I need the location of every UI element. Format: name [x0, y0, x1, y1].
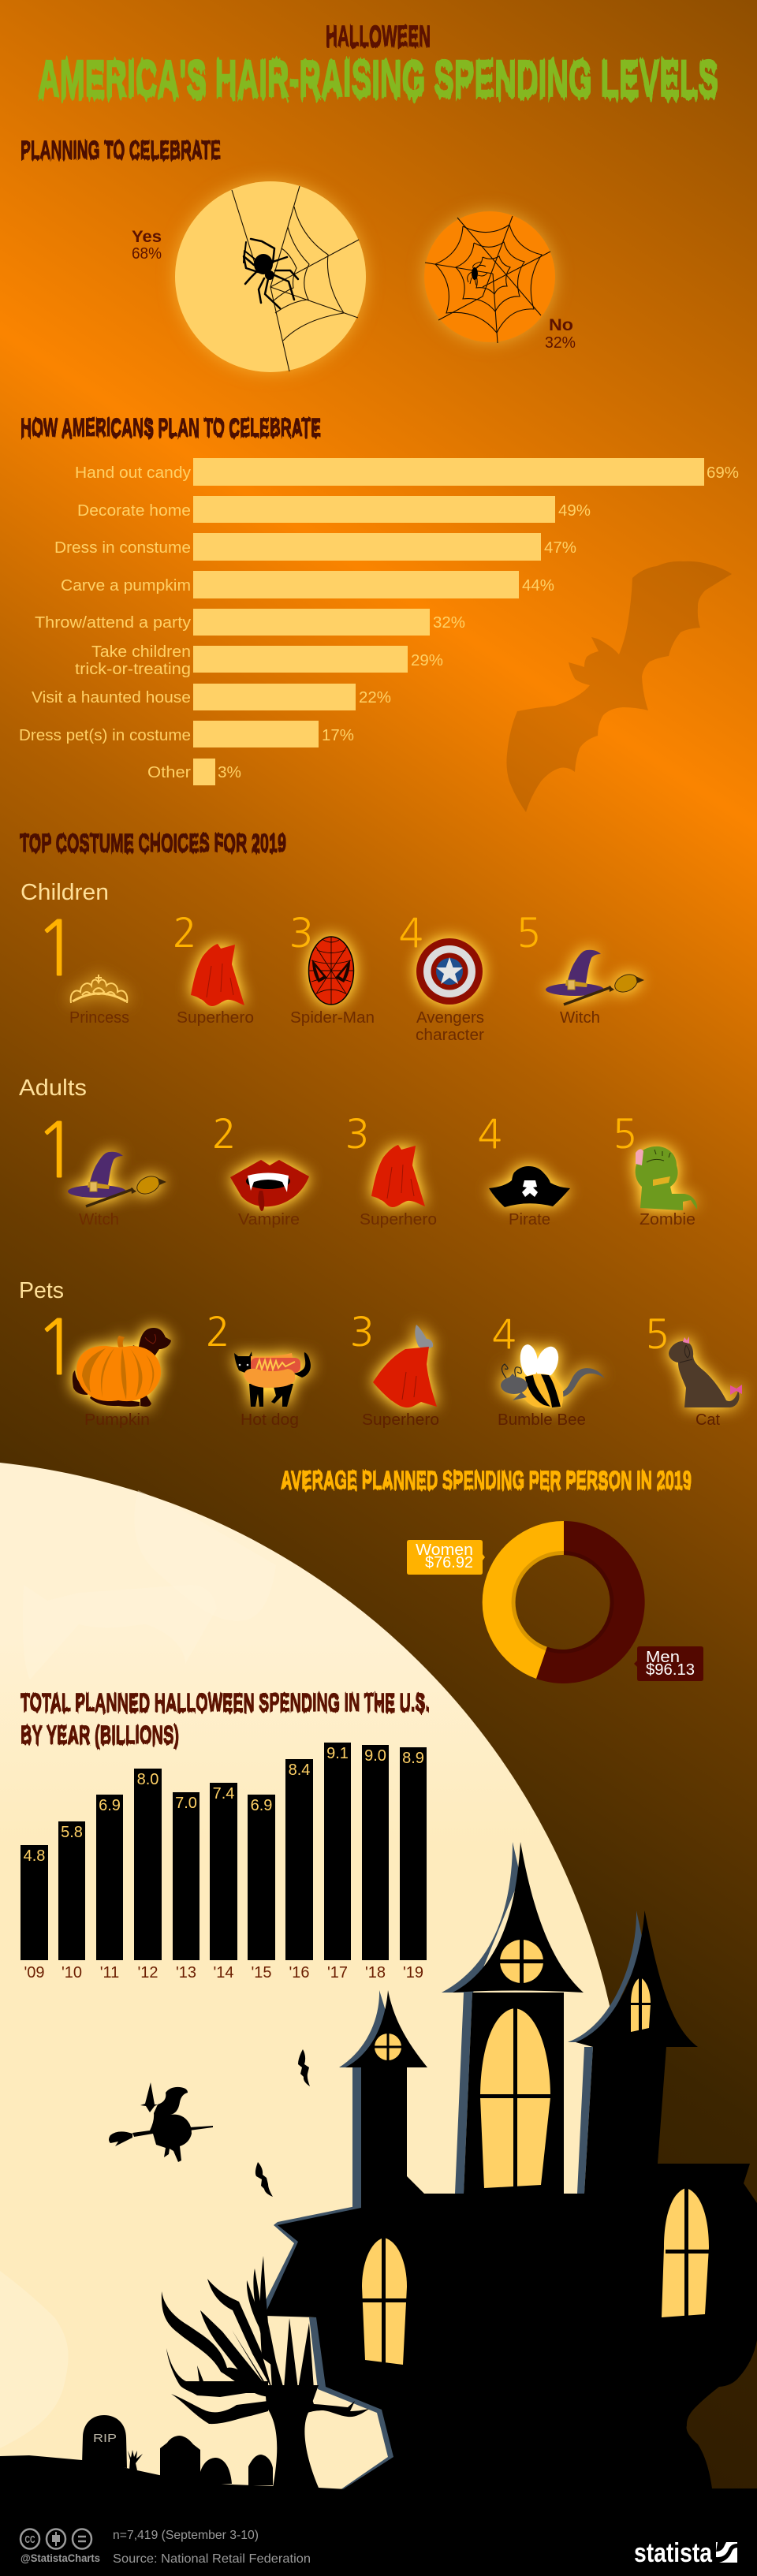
ground	[0, 2455, 347, 2576]
icon: small bat upper	[298, 2049, 310, 2086]
costume labels: Spider-Man	[290, 1009, 375, 1027]
costume labels: Pumpkin	[84, 1411, 150, 1429]
year labels: '19	[403, 1964, 423, 1981]
costume labels: Witch	[560, 1009, 600, 1027]
ranks	[34, 1310, 669, 1385]
zombie hand	[128, 2450, 143, 2470]
icon: cat in hot dog costume	[234, 1351, 311, 1407]
ranks: 4	[399, 914, 423, 953]
panel: no circle with spider web	[424, 211, 555, 343]
icon: spider-man mask	[308, 937, 354, 1005]
callout: women	[407, 1540, 485, 1575]
year labels: '14	[213, 1964, 234, 1981]
values	[24, 1745, 424, 1865]
icon: witch hat	[68, 1152, 166, 1206]
ranks	[34, 911, 540, 986]
window bars	[360, 1938, 711, 2366]
sample note: n=7,419 (September 3-10)	[113, 2529, 259, 2542]
haunted house	[258, 1842, 757, 2576]
icon: princess tiara	[71, 975, 127, 1003]
year labels: '16	[289, 1964, 310, 1981]
label: yes	[132, 228, 162, 263]
bars	[21, 1743, 427, 1960]
label: no: 32%	[545, 334, 576, 352]
year labels: '09	[24, 1964, 45, 1981]
year labels: '13	[176, 1964, 196, 1981]
year labels: '11	[100, 1964, 119, 1981]
icon: rabbit in superhero cape	[373, 1325, 437, 1407]
web	[425, 216, 550, 343]
statista logo: statista	[634, 2538, 713, 2568]
values: 3%	[218, 764, 241, 781]
icon: zombie	[636, 1146, 697, 1210]
costume labels: Zombie	[640, 1211, 695, 1228]
icon: pirate hat	[489, 1166, 570, 1207]
web	[232, 186, 359, 371]
moon circle yes	[175, 181, 366, 372]
center tower roof	[453, 1842, 584, 1993]
icon: witch hat	[546, 950, 644, 1005]
ranks	[34, 1113, 636, 1188]
ranks: 1	[34, 911, 80, 986]
costume labels	[69, 1009, 600, 1044]
bar chart: how americans plan to celebrate	[19, 458, 739, 785]
category labels: trick-or-treating	[75, 661, 191, 678]
costume labels: Cat	[695, 1411, 720, 1429]
icon: superhero cape	[371, 1145, 425, 1207]
heading: total planned spending: BY YEAR (BILLIONS)	[21, 1720, 179, 1749]
title block	[38, 20, 718, 107]
right branch	[308, 2397, 369, 2417]
callout: men: Men	[646, 1649, 680, 1666]
ranks: 3	[345, 1115, 369, 1154]
year labels: '12	[137, 1964, 158, 1981]
label: no	[545, 316, 576, 352]
subheading pets: Pets	[19, 1278, 64, 1303]
inner rims	[513, 1553, 564, 1649]
heading: total planned spending	[21, 1688, 430, 1749]
panel: pet costumes	[19, 1278, 742, 1429]
label: yes: Yes	[132, 228, 162, 246]
decorative bat silhouette	[506, 561, 732, 812]
blue trim	[258, 1842, 644, 2490]
label: yes: 68%	[132, 245, 162, 263]
costume labels: Hot dog	[241, 1411, 299, 1429]
callout: men	[634, 1646, 703, 1681]
source: Source: National Retail Federation	[113, 2552, 311, 2566]
gravestone rip	[82, 2415, 127, 2468]
panel: children costumes	[21, 880, 644, 1044]
bars	[193, 458, 704, 785]
costume labels: Superhero	[177, 1009, 254, 1027]
costume labels: Pirate	[509, 1211, 550, 1228]
big moon	[0, 1463, 627, 2576]
costume labels	[84, 1411, 720, 1429]
women slice	[483, 1521, 564, 1679]
icon: flying witch	[109, 2082, 213, 2162]
ranks: 2	[212, 1115, 236, 1154]
callout: women: $76.92	[425, 1554, 473, 1571]
category labels: Dress pet(s) in costume	[19, 727, 191, 744]
ranks: 3	[350, 1313, 374, 1352]
small spider	[468, 262, 487, 285]
values: 5.8	[61, 1824, 83, 1841]
category labels	[19, 464, 191, 781]
callout: men: $96.13	[646, 1661, 695, 1679]
left tower roof	[345, 1990, 427, 2067]
values: 6.9	[251, 1797, 272, 1814]
icon: vampire lips	[230, 1160, 309, 1211]
subheading children: Children	[21, 880, 109, 905]
ranks: 4	[492, 1315, 516, 1355]
bar chart: total spending by year	[21, 1743, 427, 1981]
values: 9.1	[326, 1745, 349, 1762]
dead tree	[162, 2256, 369, 2488]
values: 6.9	[99, 1797, 121, 1814]
ranks: 2	[173, 914, 196, 953]
values: 4.8	[24, 1847, 45, 1865]
trunk	[265, 2385, 319, 2488]
values: 49%	[558, 502, 591, 520]
icon: dog in pumpkin costume	[73, 1328, 171, 1407]
center branches	[268, 2322, 284, 2389]
right tower roof	[576, 1911, 698, 2047]
big spider	[244, 239, 298, 308]
category labels: Throw/attend a party	[35, 614, 191, 632]
values: 29%	[411, 652, 443, 669]
icon: mouse in bumble bee costume	[501, 1344, 605, 1407]
gravestone rip: RIP	[93, 2432, 117, 2445]
values: 47%	[544, 539, 576, 557]
icon: creative commons licence: CC	[25, 2533, 35, 2545]
values: 9.0	[364, 1747, 386, 1765]
icon: superhero cape	[191, 944, 244, 1006]
category labels: Dress in constume	[54, 539, 191, 557]
values: 8.9	[402, 1750, 424, 1767]
values: 8.4	[289, 1761, 310, 1779]
icon: avengers shield	[416, 938, 483, 1005]
icon: cat in dog costume	[669, 1336, 742, 1407]
costume labels: Superhero	[360, 1211, 437, 1228]
costume labels: Vampire	[238, 1211, 300, 1228]
values: 32%	[433, 614, 465, 632]
category labels: Decorate home	[77, 502, 191, 520]
values: 69%	[707, 464, 739, 482]
icon: creative commons licence	[21, 2529, 91, 2548]
donut chart: spending by gender	[483, 1521, 645, 1683]
left branches	[162, 2291, 272, 2397]
category labels: Hand out candy	[75, 464, 191, 482]
ranks: 5	[613, 1115, 636, 1154]
heading: top costume choices: TOP COSTUME CHOICES FOR 2019	[20, 829, 286, 857]
values	[218, 464, 739, 781]
windows	[362, 1940, 709, 2365]
subheading adults: Adults	[19, 1076, 87, 1101]
values: 7.4	[213, 1785, 234, 1802]
values: 7.0	[175, 1795, 197, 1812]
values: 17%	[322, 727, 354, 744]
footer	[21, 2529, 737, 2568]
ranks: 5	[516, 914, 540, 953]
label: no: No	[549, 316, 573, 334]
costume labels	[79, 1211, 695, 1228]
heading: planning to celebrate: PLANNING TO CELEBRATE	[21, 136, 221, 164]
category labels: Carve a pumpkim	[61, 577, 191, 595]
costume labels: Witch	[79, 1211, 119, 1228]
panel: adult costumes	[19, 1076, 697, 1228]
year labels: '17	[327, 1964, 348, 1981]
ranks: 2	[206, 1313, 229, 1352]
men slice	[536, 1521, 645, 1683]
ranks: 5	[645, 1315, 669, 1355]
handle: @StatistaCharts	[21, 2552, 100, 2564]
ranks: 3	[289, 914, 313, 953]
year labels: '15	[251, 1964, 272, 1981]
building silhouette	[264, 1993, 757, 2576]
graveyard	[82, 2415, 273, 2485]
category labels: Other	[147, 764, 191, 781]
callout: women: Women	[416, 1541, 473, 1559]
values: 8.0	[137, 1771, 158, 1788]
values: 22%	[359, 689, 391, 706]
costume labels: character	[416, 1027, 484, 1044]
ranks: 1	[34, 1310, 80, 1385]
moon circle no	[424, 211, 555, 342]
panel: yes circle with spider web	[175, 181, 366, 372]
heading: total planned spending: TOTAL PLANNED HALLOWEEN SPENDING IN THE U.S.	[21, 1688, 430, 1717]
ranks: 4	[478, 1115, 502, 1154]
year labels: '10	[62, 1964, 82, 1981]
supertitle: HALLOWEEN	[326, 20, 431, 52]
ranks: 1	[34, 1113, 80, 1188]
costume labels: Avengers	[416, 1009, 484, 1027]
heading: how americans plan to celebrate: HOW AMERICANS PLAN TO CELEBRATE	[21, 413, 321, 442]
costume labels: Superhero	[362, 1411, 439, 1429]
year labels	[24, 1964, 423, 1981]
icon: small bat lower	[255, 2162, 273, 2197]
upper branches	[260, 2256, 272, 2365]
costume labels: Princess	[69, 1009, 129, 1027]
category labels: Visit a haunted house	[32, 689, 191, 706]
costume labels: Bumble Bee	[498, 1411, 586, 1429]
year labels: '18	[365, 1964, 386, 1981]
values: 44%	[522, 577, 554, 595]
low left branches	[166, 2348, 268, 2397]
category labels: Take children	[91, 643, 191, 661]
moon craters	[0, 1490, 276, 2448]
